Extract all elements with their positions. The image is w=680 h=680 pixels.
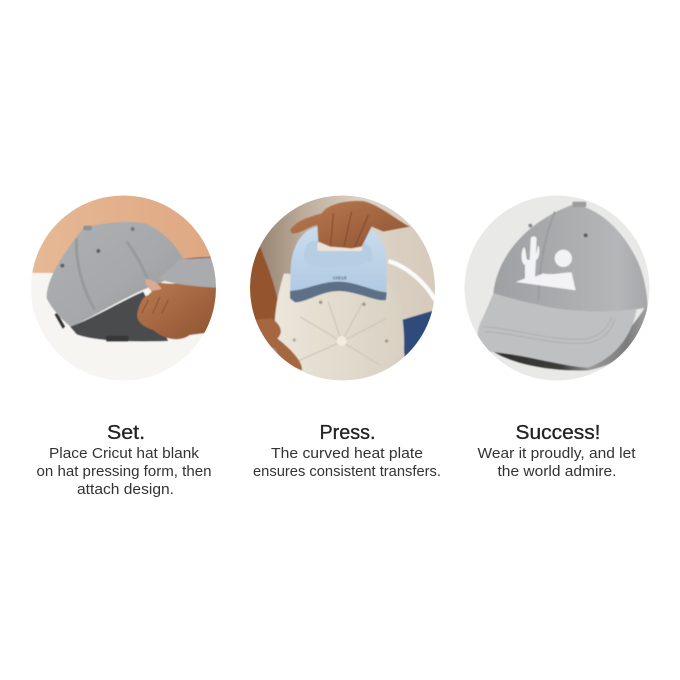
step 1 text xyxy=(36,422,212,498)
cricut logo: cricut xyxy=(333,275,347,281)
step 3 text xyxy=(478,422,636,480)
icon: dark hat pressing form xyxy=(54,292,168,342)
body: success xyxy=(478,446,636,480)
icon: arm left xyxy=(250,246,278,321)
heading: press: Press. xyxy=(320,422,376,444)
body: set: attach design. xyxy=(77,482,174,498)
icon: grey hat xyxy=(47,222,217,327)
heading: set: Set. xyxy=(107,422,145,444)
icon: top hand xyxy=(290,201,410,248)
body: set: Place Cricut hat blank xyxy=(49,446,200,462)
icon: fingers xyxy=(142,279,168,313)
icon: shadow under brim xyxy=(488,305,652,371)
panel: set photo xyxy=(30,194,220,383)
icon: jeans xyxy=(402,310,432,357)
icon: hand xyxy=(137,256,217,339)
icon: heat press xyxy=(290,227,387,302)
body: press: The curved heat plate xyxy=(271,446,423,462)
body: press: ensures consistent transfers. xyxy=(253,464,441,480)
infographic canvas xyxy=(31,196,650,497)
body: success: the world admire. xyxy=(498,464,616,480)
icon: lower hand xyxy=(250,318,302,371)
icon: cord xyxy=(388,261,435,300)
icon: hat button xyxy=(572,202,586,207)
heading: success: Success! xyxy=(516,422,600,444)
body: press xyxy=(253,446,441,480)
icon: beige hat xyxy=(275,273,404,382)
body: success: Wear it proudly, and let xyxy=(478,446,636,462)
icon: finished hat crown xyxy=(493,204,648,312)
panel: press photo xyxy=(248,194,437,384)
body: set: on hat pressing form, then xyxy=(36,464,212,480)
step 2 text xyxy=(253,422,441,480)
panel: success photo xyxy=(464,194,652,382)
icon: cactus and sun design xyxy=(516,236,576,290)
icon: brim xyxy=(478,293,637,368)
body: set xyxy=(36,446,212,498)
